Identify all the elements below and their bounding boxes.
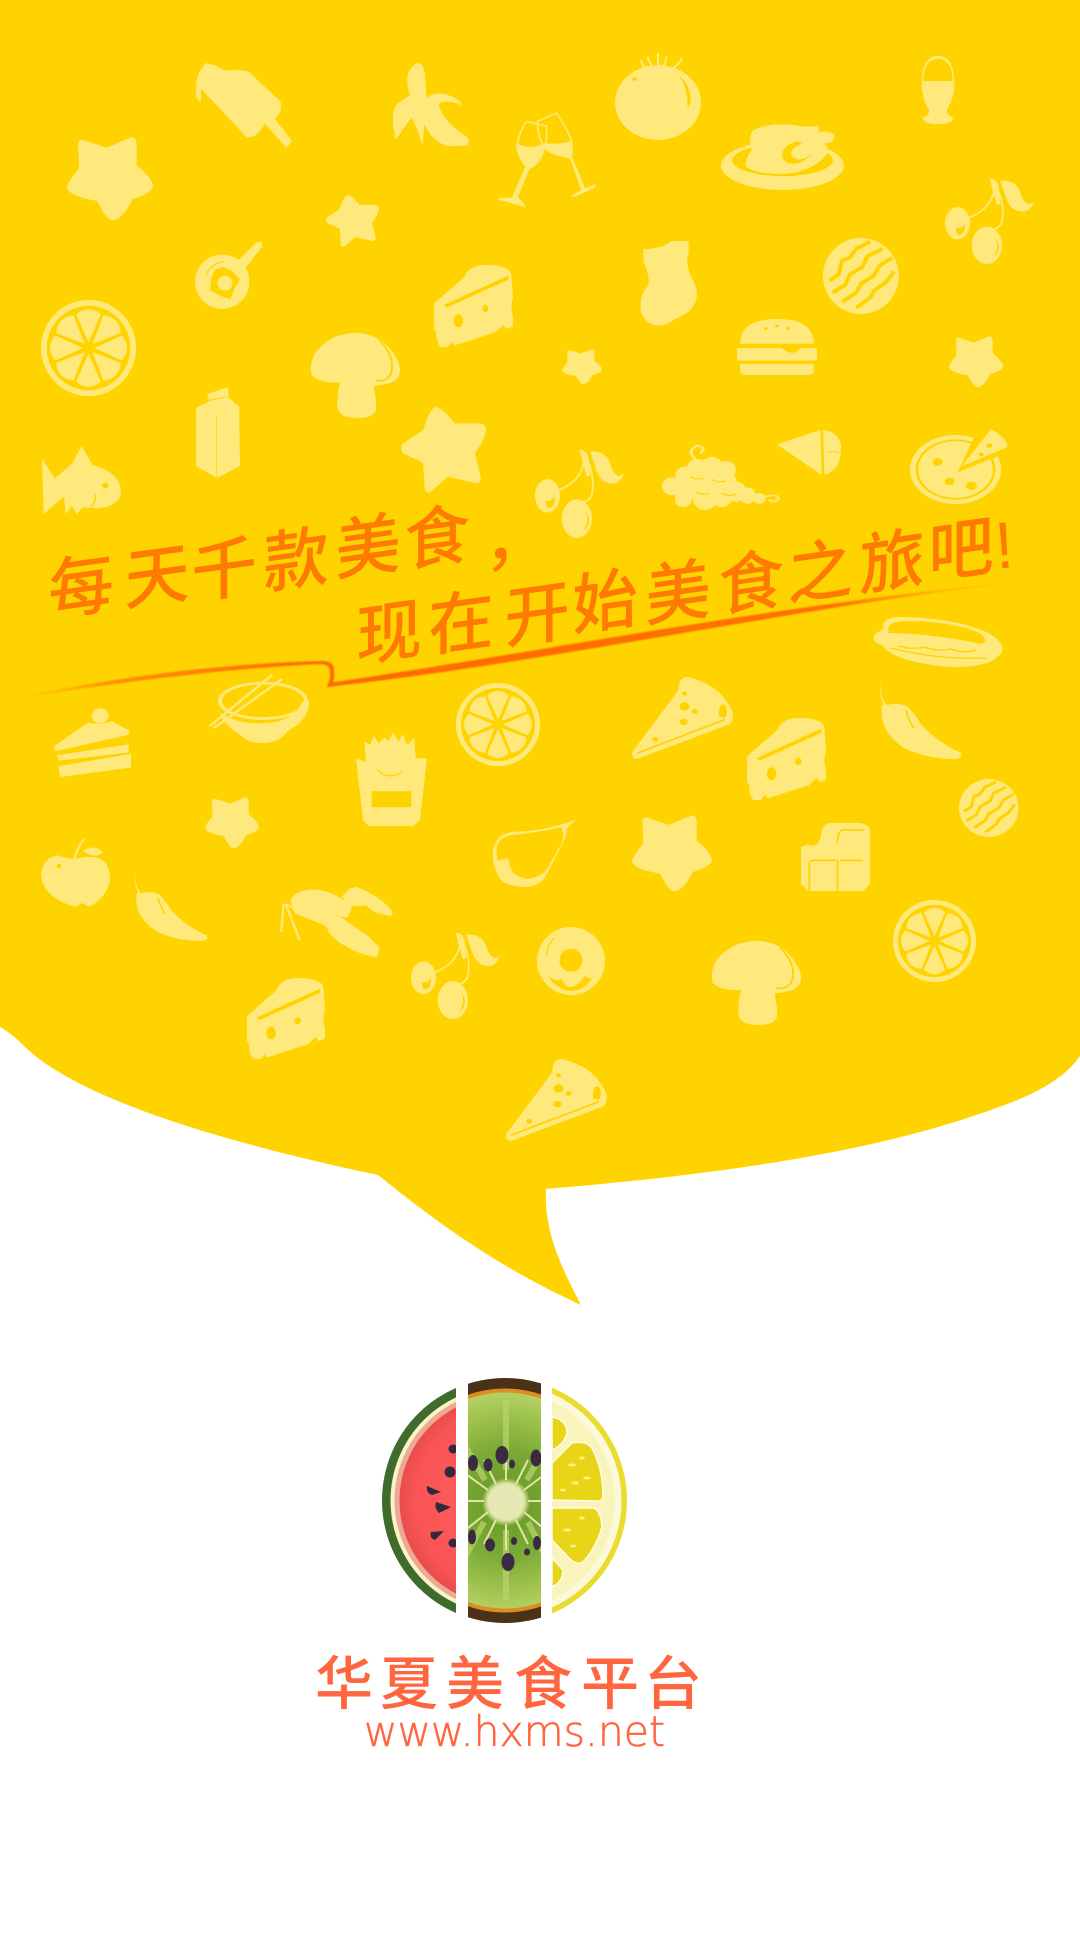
icon: mushroom [311, 333, 400, 418]
brand name: 美 [446, 1652, 504, 1717]
underline brush stroke [8, 581, 1030, 700]
icon: shrimp [281, 887, 393, 957]
icon: pizza on plate [910, 429, 1009, 504]
icon: chocolate [801, 823, 870, 891]
icon: cheese [434, 265, 513, 347]
icon: sock [641, 241, 697, 325]
headline line 2: 在 [428, 582, 494, 666]
icon: large star [401, 407, 486, 493]
icon: star [205, 797, 259, 848]
icon: small watermelon [959, 779, 1019, 837]
icon: popsicle [196, 63, 292, 148]
icon: mushroom [712, 941, 801, 1025]
icon: egg cup [922, 57, 954, 124]
icon: noodle bowl [210, 675, 309, 743]
brand name: 平 [581, 1652, 639, 1717]
icon: champagne glasses [498, 113, 597, 207]
food icon pattern [41, 53, 1034, 1141]
watermelon half [382, 1388, 456, 1613]
headline line 2: 之 [787, 531, 853, 615]
brand name: 夏 [380, 1652, 438, 1717]
headline line 1: 食 [404, 497, 470, 581]
icon: donut [537, 927, 605, 995]
headline line 2: 始 [572, 561, 638, 645]
icon: burger [737, 319, 817, 375]
headline line 2: ! [992, 507, 1016, 583]
headline line 2: 开 [504, 574, 570, 658]
brand name: 台 [644, 1652, 702, 1717]
icon: frying pan [195, 242, 262, 309]
icon: roast chicken [721, 124, 844, 190]
icon: pear [493, 820, 575, 887]
icon: tomato [615, 53, 701, 140]
panel: yellow speech bubble [0, 0, 1080, 1305]
headline line 2: 旅 [859, 521, 925, 605]
headline line 1 [48, 497, 549, 630]
icon: fish [42, 446, 121, 514]
website url: www.hxms.net [364, 1707, 665, 1756]
headline line 1: ， [483, 497, 549, 581]
icon: watermelon [823, 238, 899, 314]
icon: star right [949, 336, 1003, 387]
icon: tiny star [562, 349, 602, 384]
icon: banana [393, 63, 468, 146]
brand name [315, 1652, 702, 1717]
icon: pizza slice [632, 677, 733, 759]
headline line 2: 食 [718, 542, 784, 626]
headline line 2: 吧 [928, 509, 994, 593]
icon: star [632, 815, 712, 891]
headline [48, 497, 1016, 676]
icon: grapes [662, 445, 779, 510]
icon: cherries [535, 450, 624, 538]
icon: apple [41, 839, 110, 907]
icon: wedge [777, 430, 841, 475]
headline line 1: 每 [48, 546, 114, 630]
lemon slice [552, 1388, 627, 1614]
icon: orange slice [456, 683, 540, 766]
icon: chili [880, 682, 961, 759]
headline line 1: 千 [191, 529, 257, 613]
icon: cheese [747, 718, 826, 800]
icon: cherries [411, 933, 500, 1019]
icon: hot dog [874, 617, 1003, 667]
icon: cherries [945, 179, 1034, 264]
brand name: 华 [315, 1652, 373, 1717]
icon: fries [356, 732, 427, 826]
headline line 2: 现 [356, 592, 422, 676]
headline line 2: 美 [645, 552, 711, 636]
icon: pizza slice [506, 1059, 607, 1141]
icon: small star [326, 195, 379, 247]
icon: cheese [247, 978, 325, 1059]
icon: chili [135, 873, 207, 941]
headline line 1: 款 [263, 519, 329, 603]
logo: fruit circle [382, 1378, 628, 1623]
brand name: 食 [514, 1652, 572, 1717]
icon: star [67, 138, 153, 220]
headline line 1: 美 [335, 506, 401, 590]
icon: orange slice [893, 900, 976, 982]
headline line 2 [356, 507, 1016, 676]
icon: cake [54, 708, 131, 777]
icon: orange slice [41, 300, 136, 396]
icon: milk carton [196, 387, 240, 478]
headline line 1: 天 [124, 536, 190, 620]
kiwi slice [468, 1378, 541, 1623]
